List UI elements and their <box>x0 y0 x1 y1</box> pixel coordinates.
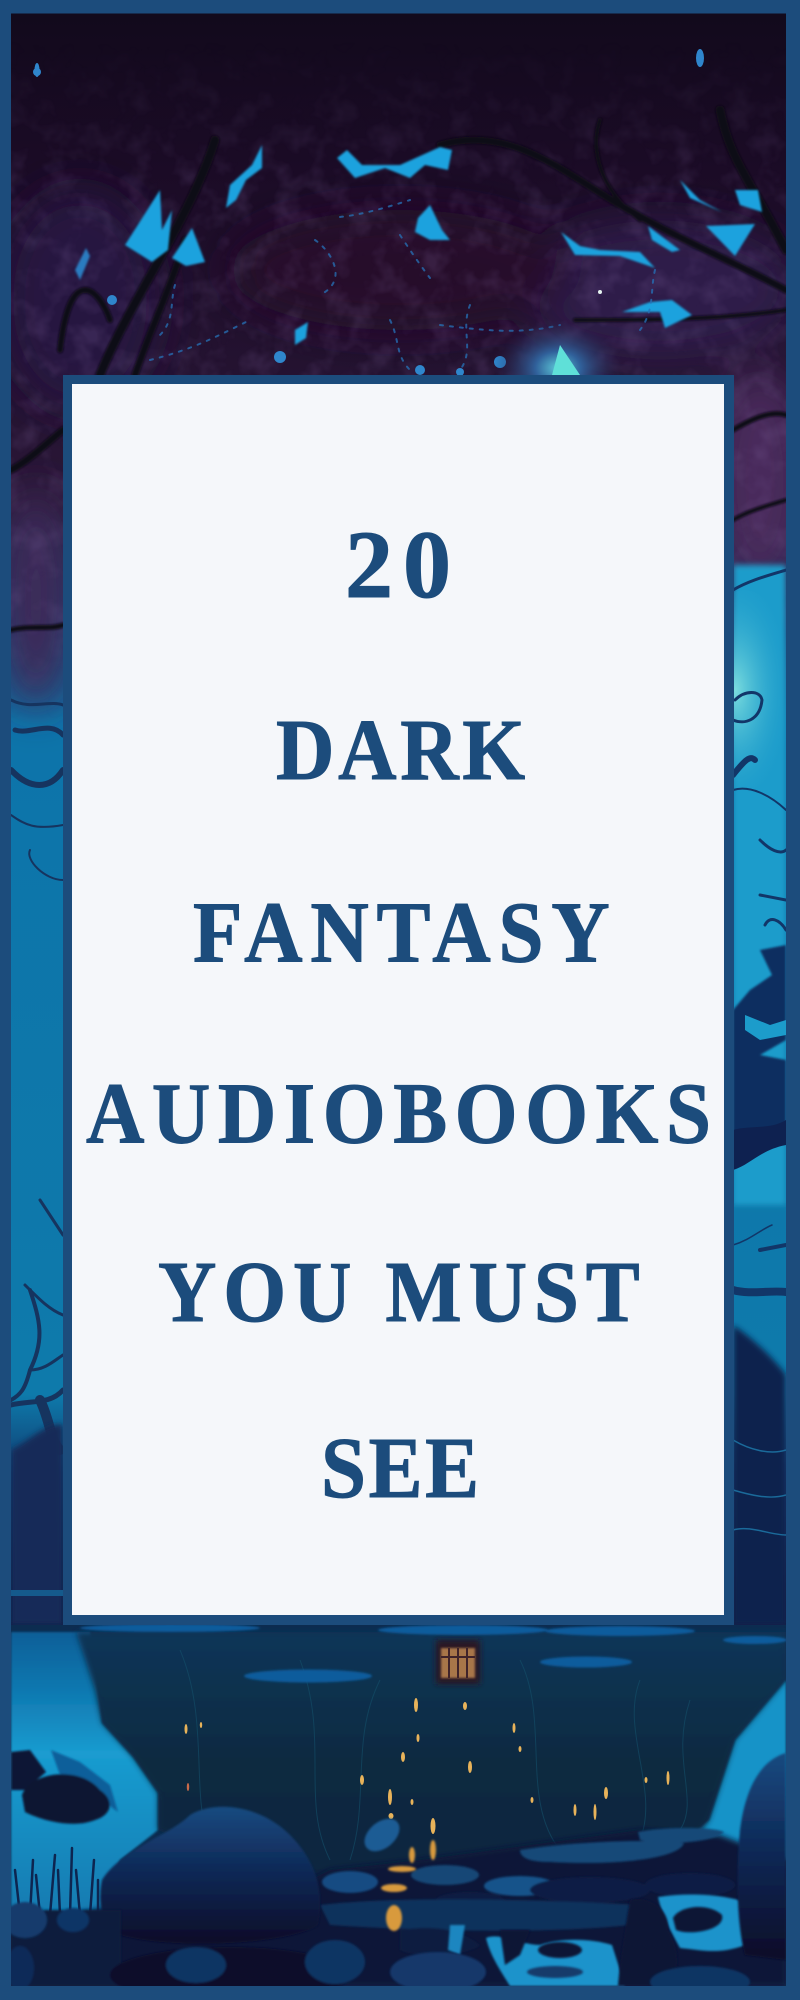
lower scene: lit window <box>436 1640 480 1684</box>
canopy: purple foliage <box>0 190 800 710</box>
canopy: glowing sky gaps <box>75 145 762 345</box>
title: FANTASY: FANTASY <box>193 885 610 981</box>
title: 20: 20 <box>345 511 451 618</box>
lower scene: dark rock on the left <box>11 1750 118 1824</box>
right side: bright cyan sky and twisting tree <box>733 565 786 1205</box>
title panel <box>63 375 734 1625</box>
title: AUDIOBOOKS: AUDIOBOOKS <box>86 1066 711 1162</box>
left side: teal sky with branches <box>11 700 63 1450</box>
canopy: small lacy highlights <box>150 200 655 370</box>
lower scene: dark cave <box>76 1632 786 1900</box>
lower scene: tall rock on the right <box>738 1753 786 1960</box>
title: DARK: DARK <box>276 702 525 799</box>
lower scene: water behind the cave <box>11 1625 786 1986</box>
canopy: tree branches <box>11 110 786 630</box>
lower scene: large boulder <box>100 1807 320 1944</box>
title: YOU MUST: YOU MUST <box>158 1244 640 1341</box>
lower scene: floating discs <box>80 1624 787 1682</box>
canopy: moon glow <box>496 324 614 375</box>
lower scene: ground and stepping stones <box>11 1830 786 1986</box>
lower scene: bright pools <box>448 1895 745 1986</box>
lower scene: grass on the left <box>15 1848 98 1915</box>
lower scene: sunken orange reflections <box>381 1840 436 1931</box>
lower scene: foreground pebbles <box>11 1900 751 1986</box>
title: SEE: SEE <box>321 1420 479 1517</box>
canopy: painterly leaf texture <box>11 101 786 622</box>
lower scene: small lantern lights <box>184 1698 670 1834</box>
